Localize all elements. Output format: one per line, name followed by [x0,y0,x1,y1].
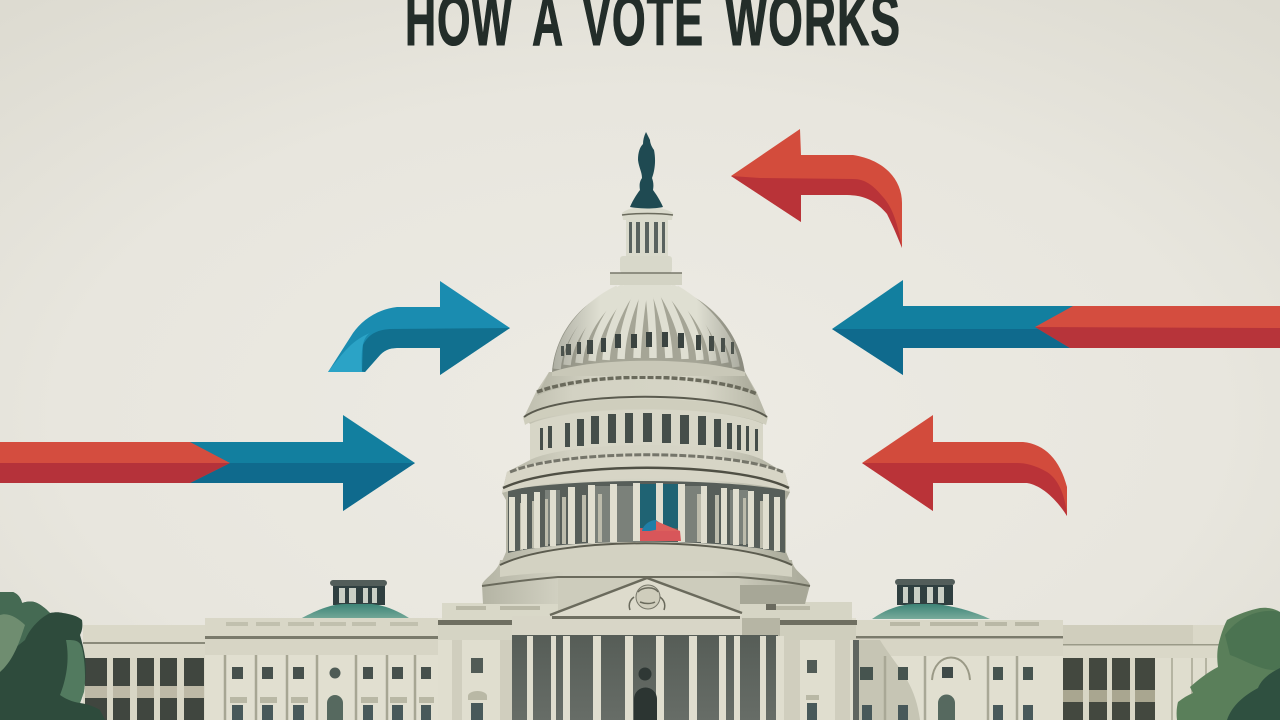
upper colonnade [523,397,768,460]
arrow: red curved top right [731,129,902,248]
title [405,0,901,61]
main dome with ribs [552,283,745,376]
arrow: blue curved left [328,281,510,375]
arrow: red curved lower right [862,415,1067,516]
far right wing [1063,625,1227,720]
left side dome [298,580,412,620]
right wing [853,620,1063,720]
tree: right [1177,608,1280,720]
left wing [205,618,440,720]
capitol building [83,132,1227,720]
central block [438,602,859,720]
upper cornice and solid drum [500,372,792,566]
dome drum base [482,560,810,616]
pediment [550,578,742,616]
colonnade base ring [500,543,792,577]
lower cornice [502,453,790,493]
tree: left [0,592,105,720]
arrow: long red and blue from left [0,415,415,511]
upper drum bands [537,372,757,396]
lower colonnade [508,481,785,553]
arrow: long blue and red from right [832,280,1280,375]
statue on top of the dome [630,132,663,208]
lantern on the dome [610,207,682,285]
far left wing [83,625,206,720]
flag on the colonnade [640,520,681,541]
right side dome [872,579,990,619]
